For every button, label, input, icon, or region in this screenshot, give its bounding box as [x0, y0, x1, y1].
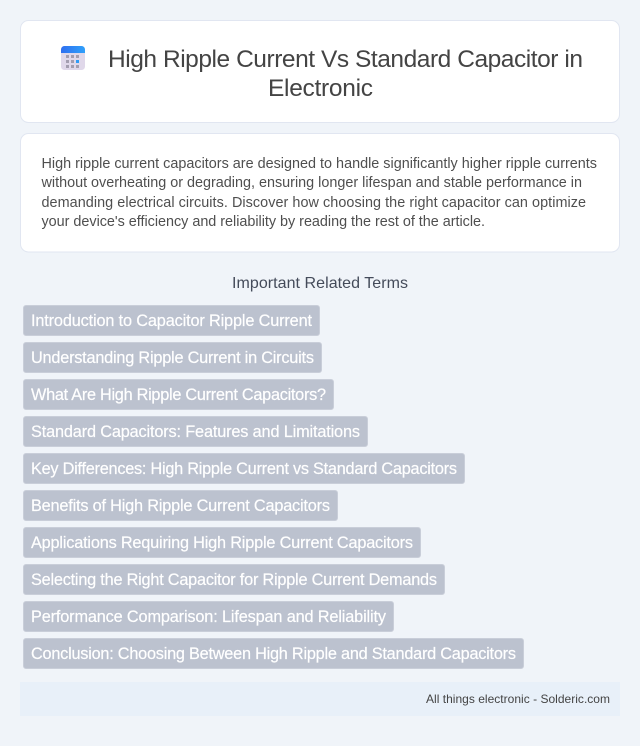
chip: applications	[24, 528, 420, 558]
chip: selecting	[24, 564, 444, 594]
text block: description: High ripple current capacitors are designed to handle significantly higher ripple currents	[42, 156, 597, 172]
text block: description: your device's efficiency and reliability by reading the rest of the article.	[42, 214, 485, 230]
chip: understanding: Understanding Ripple Current in Circuits	[31, 349, 314, 367]
chip: introduction: Introduction to Capacitor Ripple Current	[31, 312, 312, 330]
icon: calendar grid	[61, 46, 85, 70]
chip: what are	[24, 380, 334, 410]
chip: conclusion: Conclusion: Choosing Between High Ripple and Standard Capacitors	[31, 645, 516, 663]
list: related term chips	[24, 306, 524, 668]
footer: All things electronic - Solderic.com	[426, 692, 610, 706]
chip: benefits: Benefits of High Ripple Current Capacitors	[31, 497, 330, 515]
panel: title card	[20, 20, 620, 122]
chip: selecting: Selecting the Right Capacitor for Ripple Current Demands	[31, 571, 437, 589]
chip: key differences	[24, 454, 464, 484]
title: Electronic	[268, 75, 373, 102]
title	[108, 46, 583, 102]
title: High Ripple Current Vs Standard Capacitor in	[108, 46, 583, 73]
chip: understanding	[24, 342, 322, 372]
chip: introduction	[24, 306, 320, 336]
text block: description: demanding electrical circuits. Discover how choosing the right capacitor can optimize	[42, 195, 586, 211]
text block: description	[40, 156, 597, 230]
chip: key differences: Key Differences: High Ripple Current vs Standard Capacitors	[31, 460, 457, 478]
chip: benefits	[24, 490, 338, 520]
footer	[20, 682, 620, 716]
text block: description: without overheating or degrading, ensuring longer lifespan and stable performance in	[40, 175, 582, 191]
chip: what are: What Are High Ripple Current Capacitors?	[31, 386, 326, 404]
chip: performance: Performance Comparison: Lifespan and Reliability	[31, 608, 387, 626]
panel: description card	[20, 134, 620, 252]
heading: important related terms: Important Related Terms	[232, 275, 408, 292]
chip: standard capacitors	[24, 416, 368, 446]
chip: standard capacitors: Standard Capacitors: Features and Limitations	[31, 423, 360, 441]
chip: performance	[24, 602, 394, 632]
chip: applications: Applications Requiring High Ripple Current Capacitors	[31, 534, 413, 552]
chip: conclusion	[24, 638, 524, 668]
